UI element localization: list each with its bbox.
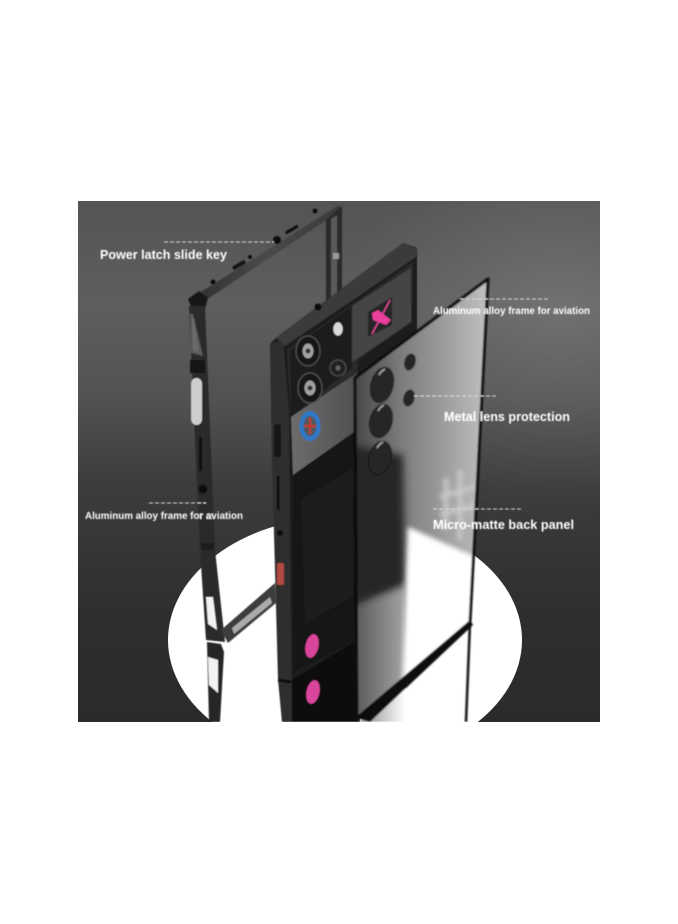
- micro-matte back panel: [350, 279, 488, 722]
- blue lens ring button: [300, 411, 320, 441]
- camera module: [290, 304, 352, 417]
- callout: micro-matte back panel: Micro-matte back panel: [433, 517, 574, 532]
- phone body: [270, 243, 417, 722]
- pink logo: [303, 633, 322, 705]
- white reflective disc: [168, 526, 522, 722]
- callout: aluminum alloy frame, left: Aluminum alloy frame for aviation: [85, 511, 243, 522]
- callout: aluminum alloy frame, right: Aluminum alloy frame for aviation: [433, 306, 590, 317]
- infographic: phone case exploded view: [78, 201, 600, 722]
- pink X display: [368, 297, 392, 337]
- lens cut-outs: [365, 353, 417, 477]
- metal bumper frame: [188, 205, 342, 722]
- callout: metal lens protection: Metal lens protection: [444, 409, 570, 424]
- side buttons: [274, 424, 284, 585]
- photo background: [78, 201, 600, 722]
- callout: Power latch slide key: Power latch slide key: [100, 247, 228, 262]
